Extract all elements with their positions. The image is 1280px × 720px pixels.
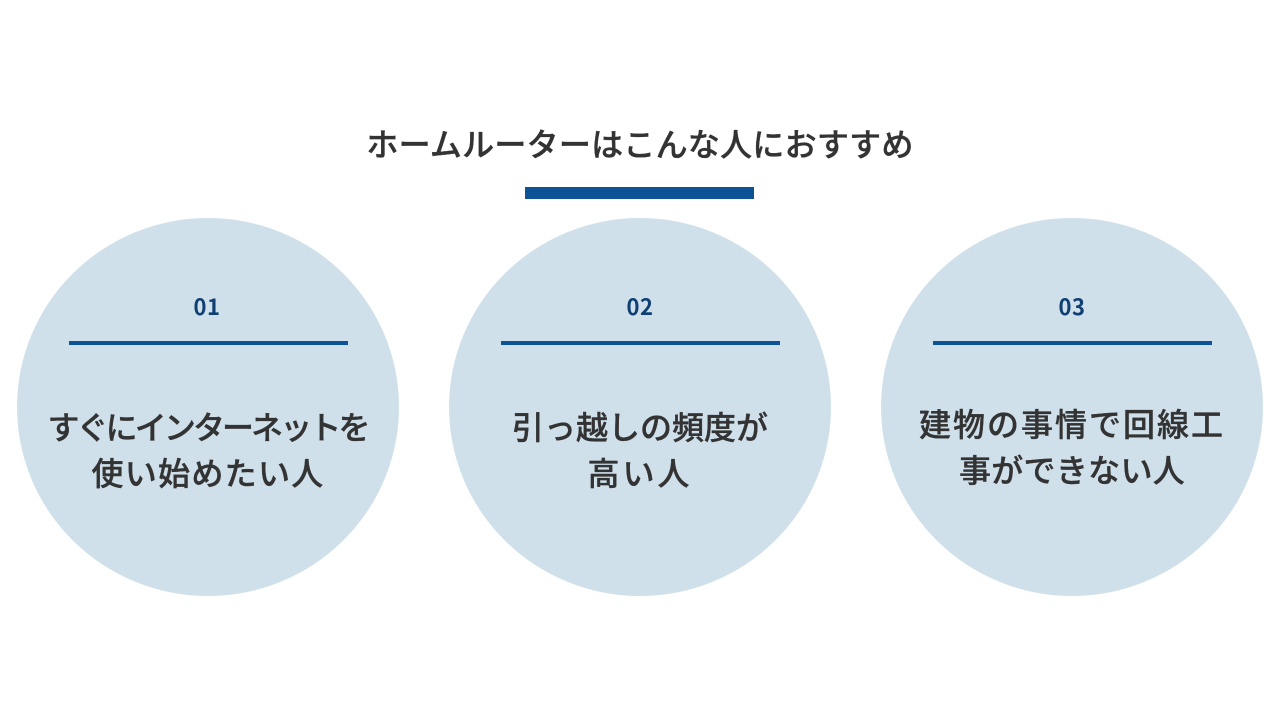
text block 01: すぐにインターネットを <box>47 403 368 449</box>
text block 02: 高い人 <box>587 449 692 495</box>
title: ホームルーターはこんな人におすすめ <box>366 120 914 166</box>
text block 03 <box>919 400 1225 492</box>
text block 01: 使い始めたい人 <box>91 449 325 495</box>
number 02: 02 <box>627 290 653 322</box>
text block 02: 引っ越しの頻度が <box>512 403 768 449</box>
divider 03 <box>933 341 1212 345</box>
panel: circle 03 <box>881 218 1263 596</box>
divider 01 <box>69 341 348 345</box>
panel: circle 01 <box>17 218 399 596</box>
title underline bar <box>525 187 754 199</box>
divider 02 <box>501 341 780 345</box>
number 01: 01 <box>194 290 220 322</box>
text block 03: 事ができない人 <box>959 446 1185 492</box>
text block 02 <box>512 403 768 495</box>
panel: circle 02 <box>449 218 831 596</box>
text block 01 <box>47 403 368 495</box>
text block 03: 建物の事情で回線工 <box>919 400 1225 446</box>
number 03: 03 <box>1059 290 1085 322</box>
